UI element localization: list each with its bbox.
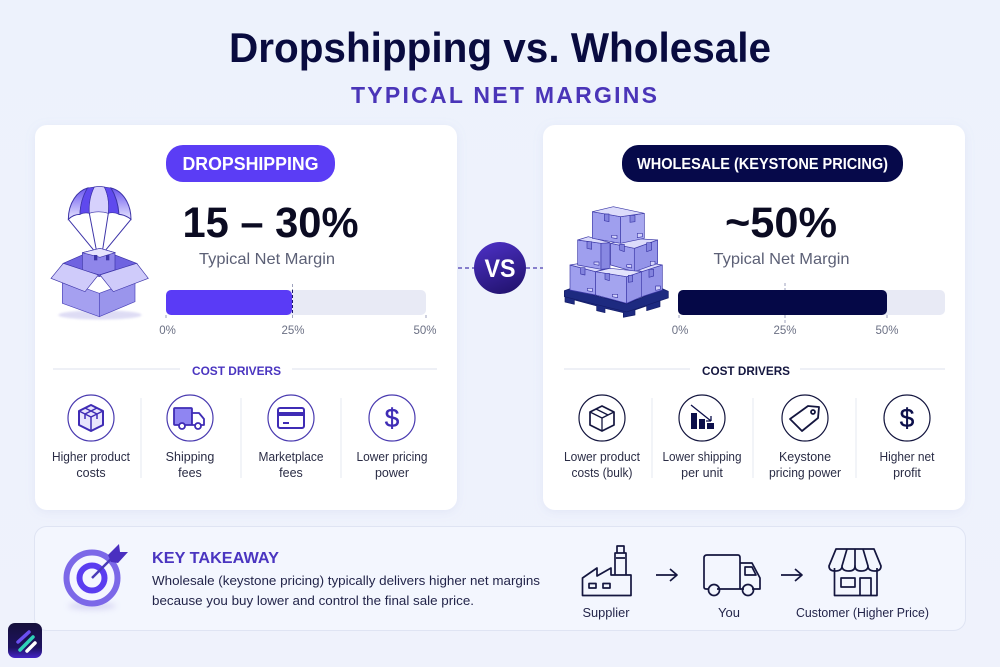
- arrow: [781, 569, 802, 581]
- driver: lower shipping per unit: per unit: [681, 466, 723, 480]
- arrow: [656, 569, 677, 581]
- icon: storefront: [829, 549, 881, 596]
- bar chart: dropshipping margin: 25%: [281, 325, 305, 337]
- margin value: 15 – 30%: [182, 199, 358, 247]
- icon: pallet of stacked boxes: [564, 207, 668, 317]
- vs badge: [458, 242, 543, 294]
- bar chart: dropshipping margin: 50%: [413, 325, 437, 337]
- panel: key takeaway: [34, 526, 966, 630]
- driver: lower pricing power: Lower pricing: [356, 450, 428, 464]
- vs badge: VS: [484, 255, 516, 283]
- driver: shipping fees: fees: [178, 466, 202, 480]
- driver: marketplace fees: Marketplace: [258, 450, 324, 464]
- driver: keystone pricing power: pricing power: [769, 466, 841, 480]
- label: customer: Customer (Higher Price): [796, 605, 929, 620]
- driver: higher product costs: Higher product: [52, 450, 130, 464]
- driver: higher net profit: profit: [893, 466, 921, 480]
- heading: cost drivers: COST DRIVERS: [192, 364, 281, 378]
- driver: marketplace fees: fees: [279, 466, 303, 480]
- badge: wholesale: WHOLESALE (KEYSTONE PRICING): [637, 156, 888, 173]
- icon: parachute carrying an open box: [51, 186, 148, 320]
- panel: wholesale: [543, 125, 965, 510]
- driver: lower pricing power: $: [385, 403, 400, 433]
- driver: keystone pricing power: Keystone: [779, 450, 831, 464]
- takeaway text: because you buy lower and control the final sale price.: [152, 593, 474, 608]
- driver: shipping fees: Shipping: [166, 450, 214, 464]
- heading: key takeaway: KEY TAKEAWAY: [152, 550, 279, 567]
- driver: higher net profit: $: [900, 403, 915, 433]
- badge: wholesale: [622, 145, 903, 182]
- driver: lower product costs: Lower product: [564, 450, 640, 464]
- logo: [8, 623, 42, 658]
- title: Dropshipping vs. Wholesale: [229, 24, 771, 71]
- margin caption: Typical Net Margin: [199, 251, 335, 268]
- flow: supplier to you to customer: [582, 546, 881, 596]
- badge: dropshipping: DROPSHIPPING: [182, 154, 318, 174]
- bar chart: wholesale margin: [672, 283, 945, 337]
- margin value: ~50%: [725, 199, 837, 247]
- heading: cost drivers: COST DRIVERS: [702, 364, 790, 378]
- icon: target with arrow: [66, 544, 128, 610]
- driver: lower shipping per unit: Lower shipping: [662, 450, 742, 464]
- takeaway text: Wholesale (keystone pricing) typically delivers higher net margins: [152, 573, 541, 588]
- driver: marketplace fees: [258, 395, 324, 480]
- label: you: You: [718, 605, 740, 620]
- driver: keystone pricing power: [769, 395, 841, 480]
- panel: dropshipping: [35, 125, 457, 510]
- driver: lower shipping per unit: [662, 395, 742, 480]
- bar chart: wholesale margin: 0%: [672, 325, 688, 337]
- driver: higher net profit: Higher net: [880, 450, 935, 464]
- driver: lower product costs: costs (bulk): [572, 466, 632, 480]
- icon: delivery truck: [704, 555, 760, 596]
- driver: lower pricing power: power: [375, 466, 409, 480]
- bar chart: dropshipping margin: 0%: [159, 325, 176, 337]
- driver: lower pricing power: [356, 395, 428, 480]
- driver: higher net profit: [880, 395, 935, 480]
- driver: higher product costs: costs: [76, 466, 106, 480]
- driver: lower product costs: [564, 395, 640, 480]
- badge: dropshipping: [166, 145, 335, 182]
- subtitle: TYPICAL NET MARGINS: [351, 82, 657, 108]
- bar chart: wholesale margin: 50%: [875, 325, 899, 337]
- driver: higher product costs: [52, 395, 130, 480]
- label: supplier: Supplier: [582, 605, 630, 620]
- bar chart: dropshipping margin: [159, 284, 437, 337]
- icon: factory: [582, 546, 631, 596]
- margin caption: Typical Net Margin: [714, 251, 850, 268]
- driver: shipping fees: [166, 395, 214, 480]
- takeaway text: [152, 573, 541, 608]
- bar chart: wholesale margin: 25%: [773, 325, 797, 337]
